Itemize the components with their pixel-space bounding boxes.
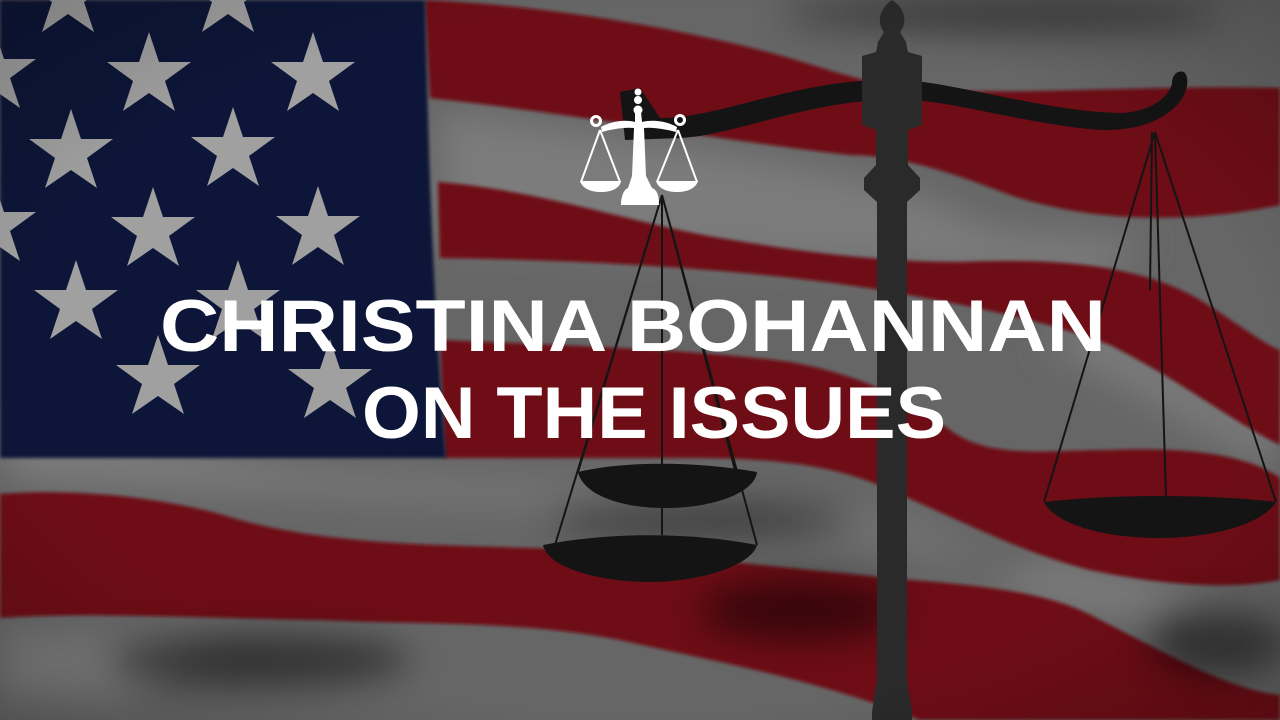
left pan lower: [543, 535, 757, 582]
small scales icon: [580, 88, 698, 205]
red stripe 1: [425, 0, 1280, 218]
right curl: [676, 116, 684, 124]
scale strings: [555, 132, 1276, 545]
small scales strings: [581, 130, 697, 182]
large silhouette scales: [543, 0, 1276, 720]
red stripe 3: [440, 340, 1280, 585]
title: ON THE ISSUES: [362, 373, 946, 454]
left pan: [580, 181, 621, 192]
stars: [0, 0, 372, 418]
left pan upper: [578, 464, 757, 508]
title: [160, 286, 1106, 454]
red stripe 2: [438, 182, 1280, 445]
right pan: [1044, 496, 1276, 538]
title: CHRISTINA BOHANNAN: [160, 286, 1106, 367]
finial and post: [634, 88, 642, 96]
blue canton: [0, 0, 446, 458]
post: [862, 0, 922, 720]
red stripe 4: [0, 492, 1280, 720]
left curl: [592, 116, 600, 126]
right pan: [656, 181, 698, 192]
beam: [620, 72, 1187, 140]
